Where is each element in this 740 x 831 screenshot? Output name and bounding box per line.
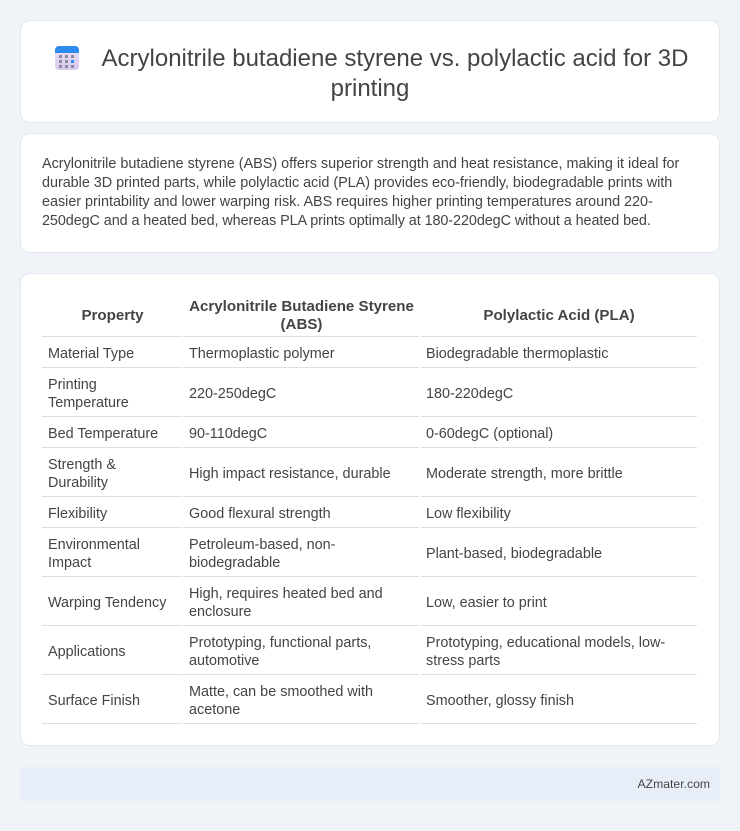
table rows: biodegradable: [189, 555, 280, 571]
panel: title card: [20, 20, 720, 123]
table rows: [42, 346, 697, 724]
intro paragraph: [42, 156, 680, 229]
table rows: Material Type: [48, 346, 134, 362]
table rows: 220-250degC: [189, 386, 276, 402]
intro paragraph: durable 3D printed parts, while polylactic acid (PLA) provides eco-friendly, biodegradable prints with: [42, 175, 672, 191]
table header: Acrylonitrile Butadiene Styrene: [189, 298, 414, 315]
footer credit: AZmater.com: [638, 777, 710, 791]
table rows: High impact resistance, durable: [189, 466, 391, 482]
panel: intro text: [20, 133, 720, 253]
table rows: High, requires heated bed and: [189, 586, 383, 602]
table rows: Low flexibility: [426, 506, 511, 522]
table rows: 90-110degC: [189, 426, 267, 442]
table rows: Biodegradable thermoplastic: [426, 346, 608, 362]
intro paragraph: easier printability and lower warping risk. ABS requires higher printing temperatures around 220-: [42, 194, 653, 210]
table rows: Smoother, glossy finish: [426, 693, 574, 709]
table rows: Bed Temperature: [48, 426, 158, 442]
intro paragraph: Acrylonitrile butadiene styrene (ABS) offers superior strength and heat resistance, making it ideal for: [42, 156, 679, 172]
title: printing: [331, 75, 409, 102]
table rows: Applications: [48, 644, 126, 660]
table rows: stress parts: [426, 653, 500, 669]
table rows: 180-220degC: [426, 386, 513, 402]
table rows: Warping Tendency: [48, 595, 166, 611]
table rows: Durability: [48, 475, 108, 491]
table rows: Thermoplastic polymer: [189, 346, 335, 362]
table rows: enclosure: [189, 604, 251, 620]
table rows: Low, easier to print: [426, 595, 547, 611]
table rows: Prototyping, functional parts,: [189, 635, 371, 651]
table rows: acetone: [189, 702, 240, 718]
icon: calendar: [55, 46, 79, 70]
table rows: Impact: [48, 555, 91, 571]
table header: Polylactic Acid (PLA): [483, 307, 635, 324]
table rows: Environmental: [48, 537, 140, 553]
table rows: Matte, can be smoothed with: [189, 684, 373, 700]
table rows: Good flexural strength: [189, 506, 331, 522]
table rows: Moderate strength, more brittle: [426, 466, 623, 482]
table rows: Plant-based, biodegradable: [426, 546, 602, 562]
table header: [42, 298, 697, 337]
table rows: Temperature: [48, 395, 129, 411]
table rows: Printing: [48, 377, 97, 393]
table header: (ABS): [281, 316, 322, 333]
table rows: Prototyping, educational models, low-: [426, 635, 665, 651]
table header: Property: [81, 307, 144, 324]
footer bar: [20, 767, 720, 801]
table rows: Flexibility: [48, 506, 107, 522]
table rows: Strength &: [48, 457, 116, 473]
table rows: automotive: [189, 653, 259, 669]
title: Acrylonitrile butadiene styrene vs. polylactic acid for 3D: [102, 45, 688, 72]
table rows: 0-60degC (optional): [426, 426, 553, 442]
intro paragraph: 250degC and a heated bed, whereas PLA prints optimally at 180-220degC without a heated bed.: [42, 213, 651, 229]
panel: comparison table: [20, 273, 720, 746]
table rows: Petroleum-based, non-: [189, 537, 335, 553]
table rows: Surface Finish: [48, 693, 140, 709]
title: [102, 45, 688, 102]
